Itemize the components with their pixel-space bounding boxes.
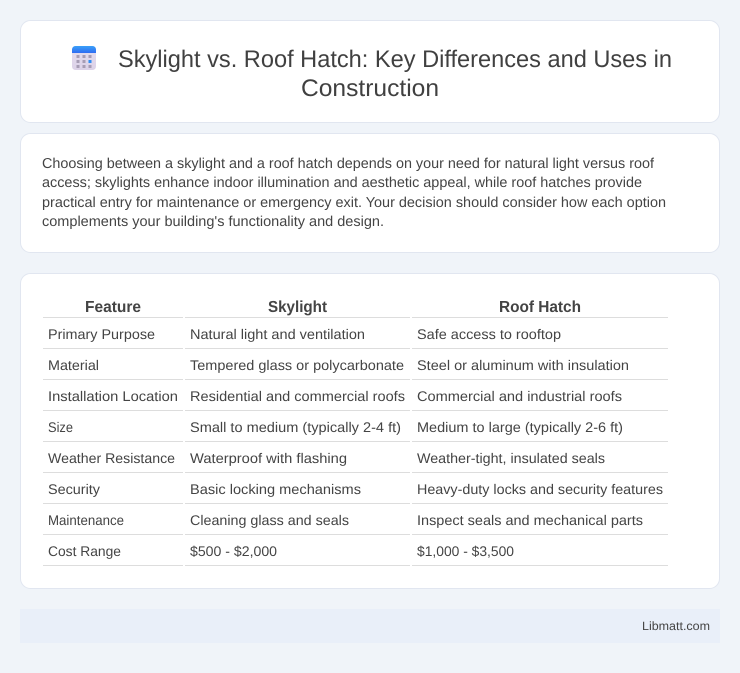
row: primary purpose: Safe access to rooftop <box>417 326 561 342</box>
row: maintenance: Maintenance <box>48 512 124 528</box>
row: material <box>43 357 668 380</box>
row: cost range: $500 - $2,000 <box>190 543 277 559</box>
icon: calendar <box>72 46 96 70</box>
row: size <box>43 419 668 442</box>
row: installation location: Commercial and industrial roofs <box>417 388 622 404</box>
row: size: Size <box>48 419 73 435</box>
title <box>118 46 672 102</box>
row: maintenance: Inspect seals and mechanical parts <box>417 512 643 528</box>
title: Skylight vs. Roof Hatch: Key Differences and Uses in <box>118 46 672 73</box>
row: installation location <box>43 388 668 411</box>
row: cost range: $1,000 - $3,500 <box>417 543 514 559</box>
row: installation location: Residential and commercial roofs <box>190 388 405 404</box>
row: weather resistance: Weather Resistance <box>48 450 175 466</box>
row: cost range <box>43 543 668 566</box>
panel: title header <box>20 20 720 122</box>
row: security <box>43 481 668 504</box>
panel: introduction text: Choosing between a skylight and a roof hatch depends on your need for natural light versus roof <box>42 156 655 172</box>
row: installation location: Installation Location <box>48 388 178 404</box>
row: weather resistance: Waterproof with flashing <box>190 450 347 466</box>
footer <box>20 609 720 643</box>
footer: Libmatt.com <box>642 619 710 633</box>
table header row: Roof Hatch <box>499 299 581 316</box>
panel: introduction text: practical entry for maintenance or emergency exit. Your decision should consider how each option <box>42 195 666 211</box>
table header row: Skylight <box>268 299 328 316</box>
row: cost range: Cost Range <box>48 543 121 559</box>
row: weather resistance <box>43 450 668 473</box>
row: security: Basic locking mechanisms <box>190 481 361 497</box>
table header row <box>43 299 668 318</box>
row: material: Material <box>48 357 99 373</box>
panel: introduction text: complements your building's functionality and design. <box>42 214 384 230</box>
panel: introduction text <box>20 134 720 252</box>
row: primary purpose: Natural light and ventilation <box>190 326 365 342</box>
row: maintenance <box>43 512 668 535</box>
title: Construction <box>301 75 439 102</box>
table header row: Feature <box>85 299 141 316</box>
row: primary purpose <box>43 326 668 349</box>
row: weather resistance: Weather-tight, insulated seals <box>417 450 605 466</box>
row: size: Medium to large (typically 2-6 ft) <box>417 419 623 435</box>
panel: comparison table <box>20 274 720 588</box>
panel: introduction text: access; skylights enhance indoor illumination and aesthetic appeal, while roof hatches provide <box>42 175 642 191</box>
row: primary purpose: Primary Purpose <box>48 326 155 342</box>
row: maintenance: Cleaning glass and seals <box>190 512 349 528</box>
row: size: Small to medium (typically 2-4 ft) <box>190 419 401 435</box>
row: material: Tempered glass or polycarbonate <box>190 357 404 373</box>
row: security: Security <box>48 481 100 497</box>
row: security: Heavy-duty locks and security features <box>417 481 663 497</box>
row: material: Steel or aluminum with insulation <box>417 357 629 373</box>
